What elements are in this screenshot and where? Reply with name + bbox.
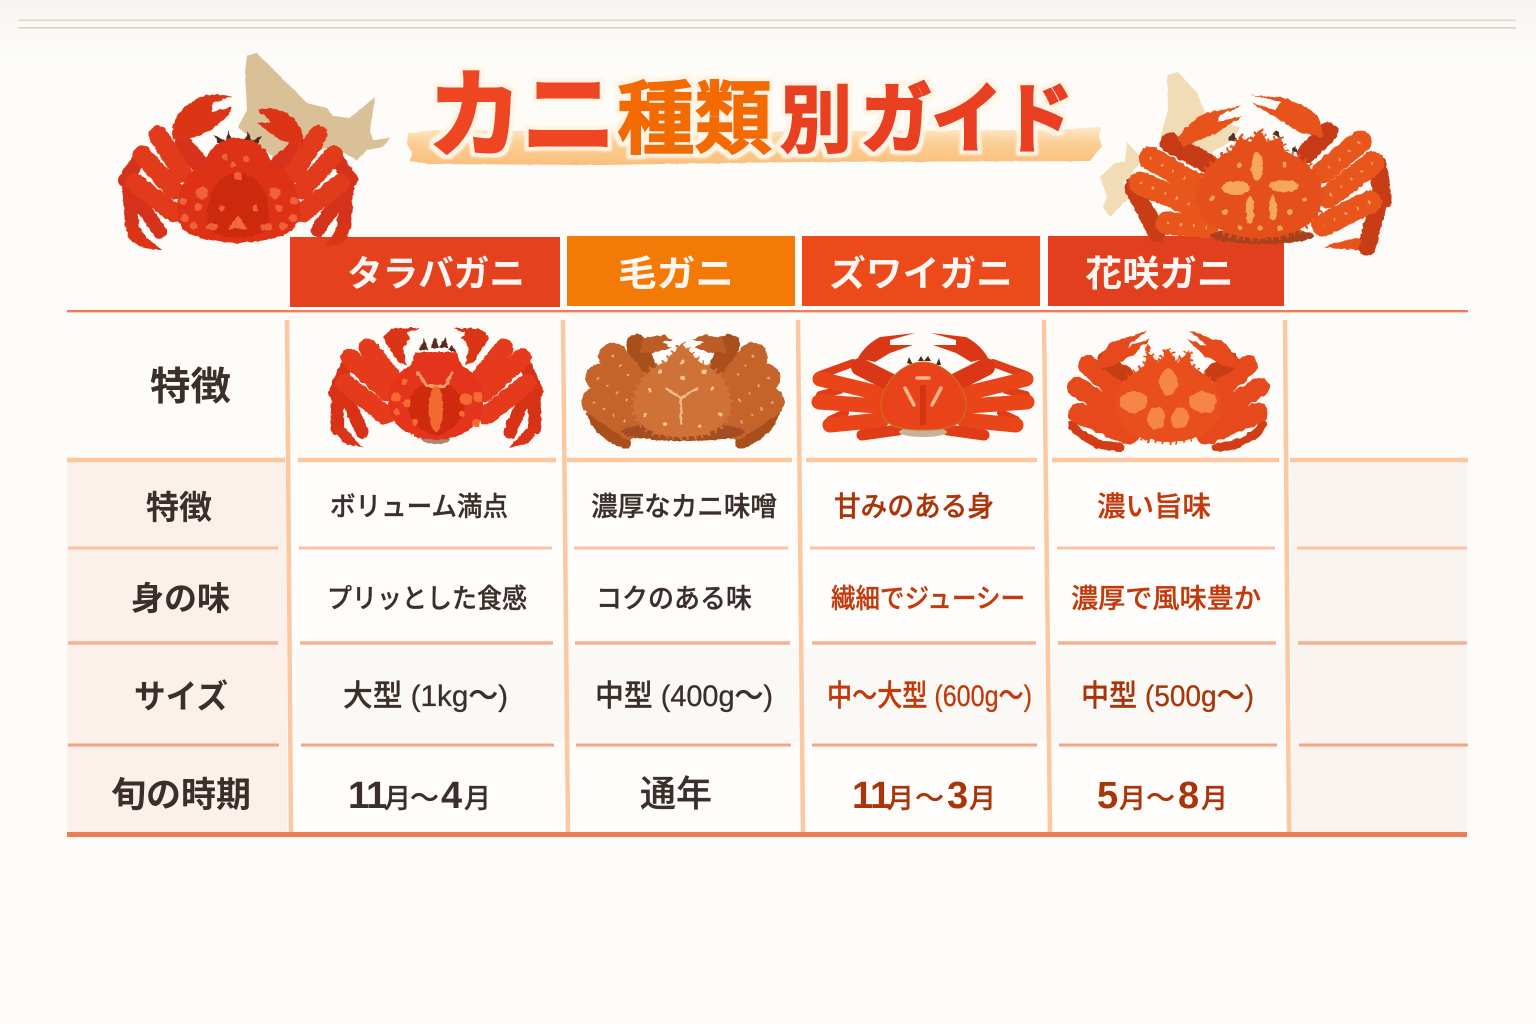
title text: 種類 [617, 75, 772, 164]
header: タラバガニ: タラバガニ [347, 253, 525, 294]
illustration: Hokkaido and Tohoku map right [1100, 72, 1240, 217]
centre cell tints [292, 462, 1288, 833]
column 4 values: 花咲ガニ: 月 [1119, 784, 1146, 814]
illustration: top right flower crab [1133, 95, 1383, 250]
column 2 values: 毛ガニ [591, 492, 777, 814]
column 3 values: ズワイガニ: 11 [852, 775, 891, 817]
column 3 values: ズワイガニ: 月 [887, 784, 914, 814]
header: ズワイガニ: ズワイガニ [829, 253, 1013, 294]
header: タラバガニ [290, 237, 560, 307]
column 4 values: 花咲ガニ: 月 [1201, 784, 1228, 814]
row labels: 身の味 [131, 580, 230, 617]
table: crab comparison [67, 310, 1468, 837]
brush stroke band [407, 127, 1102, 165]
illustration: Hokkaido map left [238, 53, 390, 160]
column 4 values: 花咲ガニ: 濃い旨味 [1097, 491, 1211, 522]
column 3 values: ズワイガニ: ～ [915, 783, 944, 815]
column 3 values: ズワイガニ [827, 491, 1032, 817]
column 1 values: タラバガニ: 11 [348, 775, 387, 817]
column 1 values: タラバガニ: 月 [464, 784, 491, 814]
column 3 values: ズワイガニ: 月 [969, 784, 996, 814]
column 4 values: 花咲ガニ: 8 [1178, 775, 1199, 817]
table rules [67, 310, 1468, 837]
column 3 values: ズワイガニ: 甘みのある身 [834, 491, 994, 522]
column 3 values: ズワイガニ: 繊細でジューシー [831, 584, 1025, 614]
column 4 values: 花咲ガニ: 中型 (500g～) [1081, 680, 1254, 713]
title text [428, 63, 1073, 170]
row labels: 特徴 [150, 366, 231, 409]
row labels: サイズ [134, 678, 228, 715]
column 2 values: 毛ガニ: 中型 (400g～) [595, 680, 773, 713]
column 3 values: ズワイガニ: 中～大型 (600g～) [827, 680, 1032, 713]
top band with double rule [0, 0, 1536, 60]
illustration: ズワイガニ crab [819, 333, 1027, 437]
column 1 values: タラバガニ: 4 [441, 775, 462, 817]
column 1 values: タラバガニ: 月 [384, 784, 411, 814]
header: 花咲ガニ [1048, 236, 1284, 306]
illustration: 毛ガニ crab [590, 335, 776, 443]
column 2 values: 毛ガニ: コクのある味 [596, 584, 752, 614]
title with brush band [407, 63, 1102, 170]
header: 花咲ガニ: 花咲ガニ [1085, 253, 1234, 294]
header: ズワイガニ [802, 236, 1040, 306]
row label column tint [67, 462, 287, 833]
empty right column tint [1291, 462, 1467, 833]
column 4 values: 花咲ガニ: 5 [1097, 775, 1118, 817]
column 1 values: タラバガニ: プリッとした食感 [327, 584, 527, 614]
column 1 values: タラバガニ [327, 492, 527, 817]
column 3 values: ズワイガニ: 3 [947, 775, 968, 817]
column 1 values: タラバガニ: ～ [410, 783, 439, 815]
header: 毛ガニ [567, 236, 795, 306]
row labels: 特徴 [146, 489, 212, 526]
column 1 values: タラバガニ: ボリューム満点 [330, 492, 508, 522]
title text: カニ [428, 63, 616, 170]
header: 毛ガニ: 毛ガニ [618, 253, 734, 294]
column 4 values: 花咲ガニ [1071, 491, 1261, 817]
column 4 values: 花咲ガニ: ～ [1146, 783, 1175, 815]
title text: ガイド [861, 78, 1073, 163]
column 4 values: 花咲ガニ: 濃厚で風味豊か [1071, 584, 1261, 614]
row labels [111, 366, 251, 815]
row labels: 旬の時期 [111, 776, 251, 815]
illustration: top left red king crab [125, 94, 351, 250]
column 1 values: タラバガニ: 大型 (1kg～) [343, 680, 508, 713]
illustration: タラバガニ crab [333, 328, 539, 448]
illustration: 花咲ガニ crab [1073, 330, 1263, 447]
title text: 別 [780, 79, 852, 162]
column 2 values: 毛ガニ: 通年 [640, 773, 712, 814]
column 2 values: 毛ガニ: 濃厚なカニ味噌 [591, 492, 777, 522]
column headers [290, 236, 1284, 307]
